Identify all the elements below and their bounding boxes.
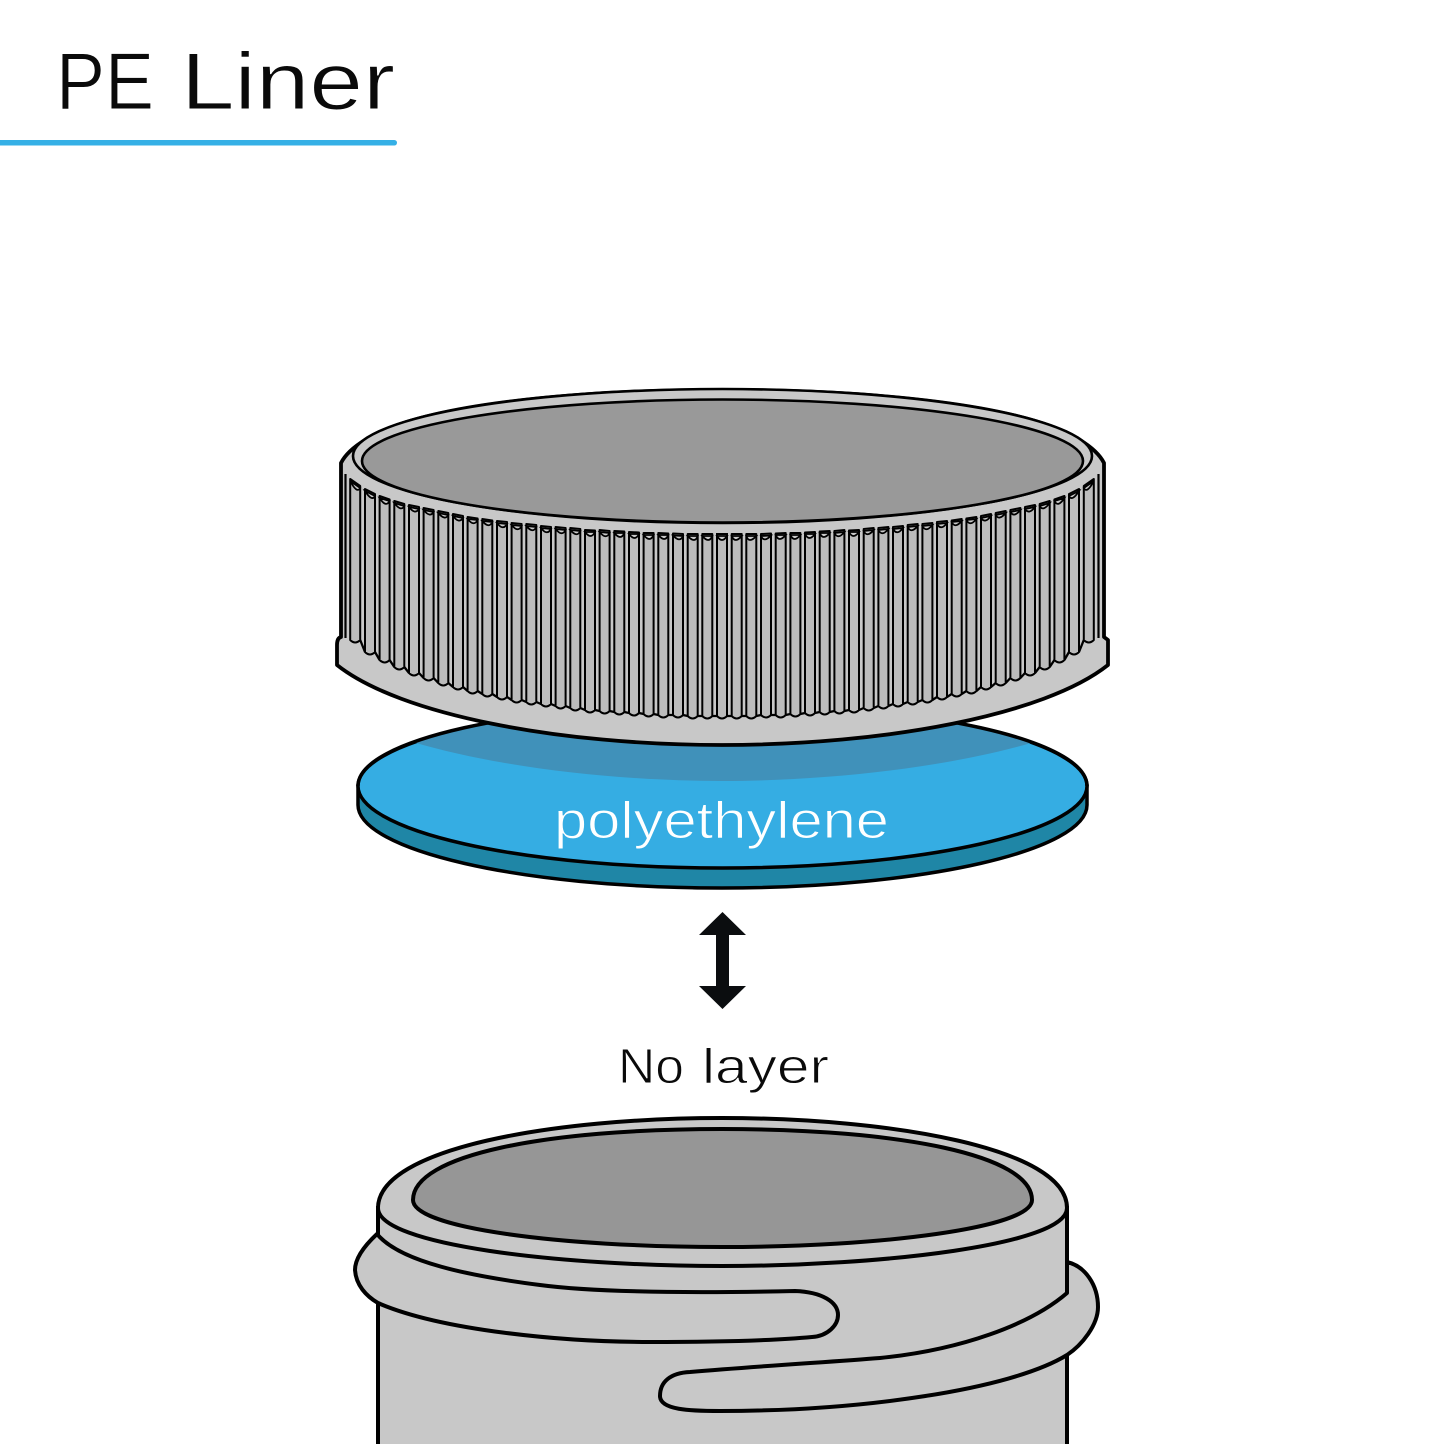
label: No layer: No bbox=[618, 1040, 684, 1094]
label: No layer: layer bbox=[702, 1040, 829, 1094]
title: PE Liner bbox=[0, 37, 397, 146]
cap top rim bbox=[353, 389, 1092, 523]
cap ribs, right half bbox=[727, 479, 1094, 718]
jar rim bbox=[378, 1118, 1067, 1266]
cap ribs, left half bbox=[350, 479, 717, 718]
screw cap bbox=[337, 389, 1108, 745]
cap interior bbox=[362, 400, 1083, 522]
jar body bbox=[378, 1208, 1067, 1444]
liner label: polyethylene bbox=[554, 792, 889, 850]
right thread bbox=[660, 1262, 1098, 1411]
title: PE Liner: PE bbox=[56, 37, 154, 127]
double arrow bbox=[699, 912, 746, 1009]
polyethylene liner disc bbox=[358, 700, 1087, 888]
title: PE Liner: Liner bbox=[181, 37, 395, 127]
left thread bbox=[355, 1234, 838, 1342]
centre rib bbox=[717, 534, 727, 718]
cap side edge lines bbox=[346, 474, 1098, 638]
cap body and skirt bbox=[337, 390, 1108, 745]
jar wall patch over thread junction bbox=[1065, 1210, 1069, 1444]
cap shadow on liner bbox=[413, 700, 1031, 781]
jar bbox=[355, 1118, 1098, 1444]
jar opening bbox=[413, 1129, 1032, 1247]
label: No layer bbox=[618, 1040, 829, 1094]
